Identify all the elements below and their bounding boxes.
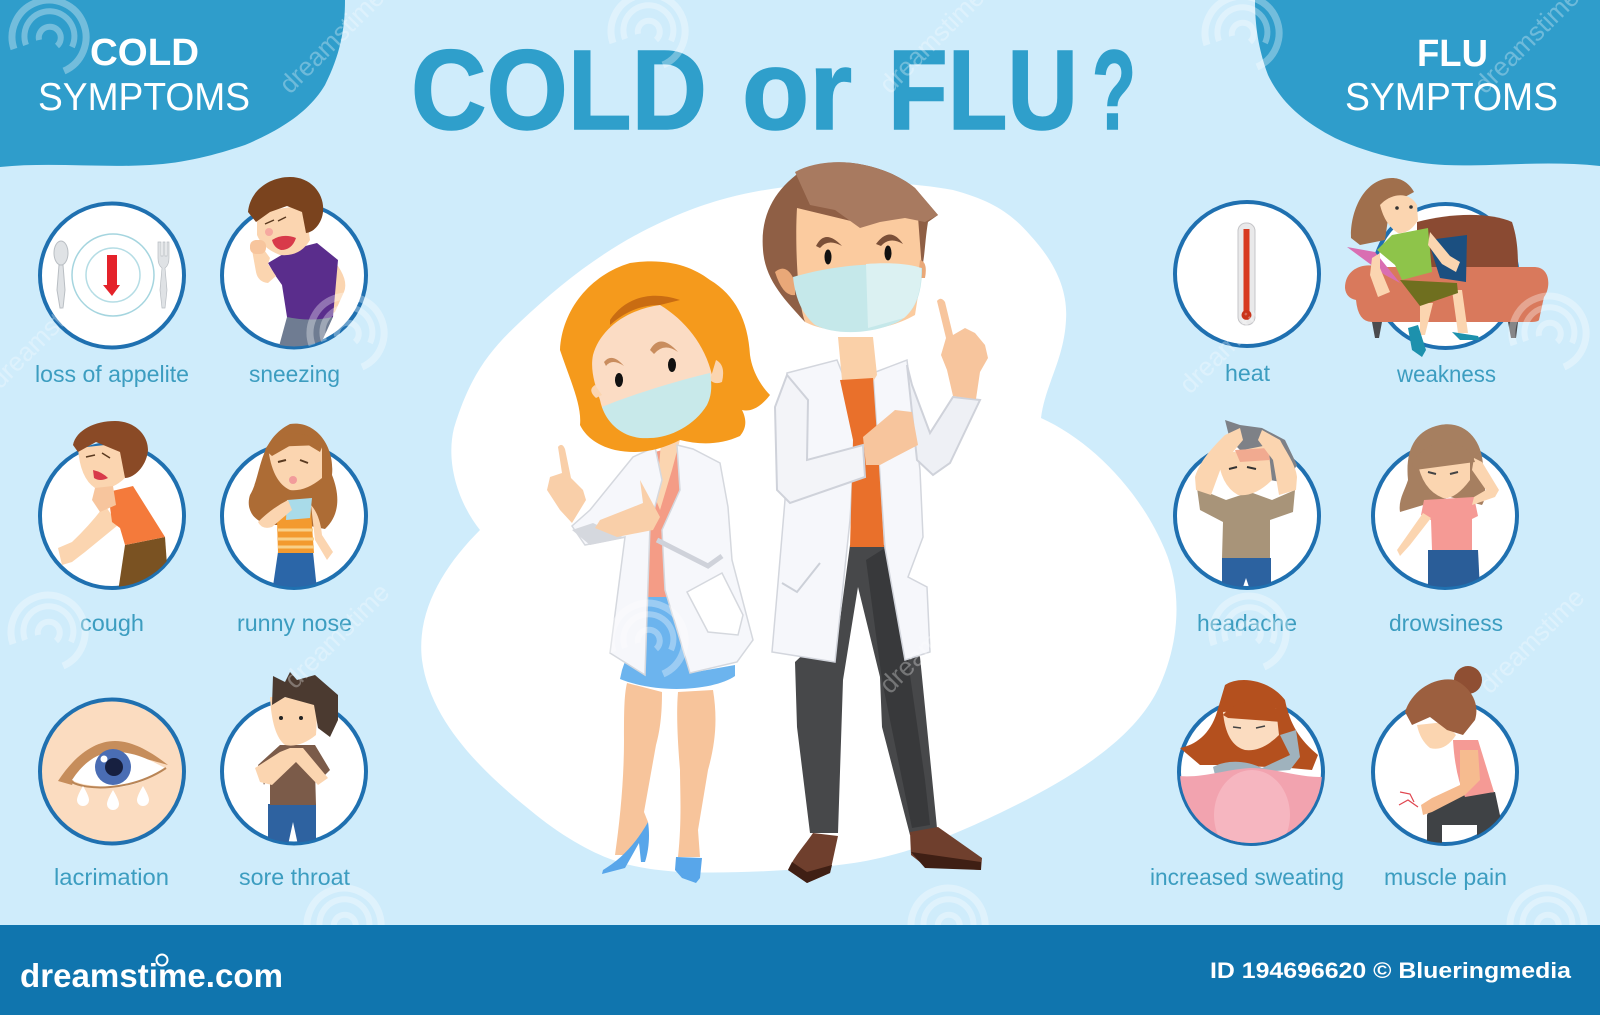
woman on sofa bbox=[1345, 178, 1548, 357]
coat body bbox=[772, 360, 930, 662]
flu heading: FLU bbox=[1417, 33, 1488, 75]
symptom: lacrimation bbox=[40, 700, 184, 890]
doctor: man bbox=[763, 162, 988, 883]
raised hand bbox=[937, 299, 988, 399]
ring bbox=[1175, 202, 1319, 346]
ring bbox=[1373, 444, 1517, 588]
symptom: muscle pain bbox=[1373, 666, 1517, 890]
flu subheading: SYMPTOMS bbox=[1345, 76, 1558, 119]
watermark: dreamstime bbox=[1173, 282, 1290, 399]
arms bbox=[907, 365, 980, 475]
pocket bbox=[687, 573, 743, 635]
cold subheading: SYMPTOMS bbox=[38, 76, 250, 119]
drowsy girl bbox=[1397, 424, 1499, 590]
watermark: dreamstime bbox=[873, 582, 990, 699]
footer bar bbox=[0, 925, 1600, 1015]
girl with tissue bbox=[249, 424, 337, 590]
label: drowsiness bbox=[1389, 610, 1503, 636]
footer logo: dreamstime.com bbox=[20, 957, 283, 994]
brows bbox=[604, 341, 678, 366]
hair bbox=[560, 261, 770, 452]
shirt bbox=[840, 378, 884, 547]
man with headache bbox=[1195, 420, 1297, 590]
thermometer bbox=[1238, 223, 1255, 325]
ring bbox=[222, 204, 366, 348]
label: muscle pain bbox=[1384, 864, 1507, 890]
label: loss of appelite bbox=[35, 361, 189, 387]
brows bbox=[816, 234, 903, 248]
symptom: loss of appetite bbox=[35, 204, 189, 387]
boy holding throat bbox=[255, 672, 338, 845]
symptom: runny nose bbox=[222, 424, 366, 636]
watermark: dreamstime bbox=[278, 577, 395, 694]
trousers bbox=[795, 545, 937, 835]
footer credit: ID 194696620 © Blueringmedia bbox=[1210, 958, 1572, 983]
symptom: cough bbox=[40, 421, 184, 636]
header: flu symptoms bbox=[1255, 0, 1600, 166]
coat bbox=[572, 445, 753, 675]
label: cough bbox=[80, 610, 144, 636]
title: COLD bbox=[411, 27, 707, 153]
fringe bbox=[610, 296, 680, 325]
ring bbox=[1179, 700, 1323, 844]
girl under blanket bbox=[1180, 680, 1322, 843]
header: cold symptoms bbox=[0, 0, 345, 167]
shirt bbox=[648, 445, 680, 597]
symptom: sore throat bbox=[222, 672, 366, 890]
coat pocket bbox=[782, 563, 820, 592]
ring bbox=[1373, 700, 1517, 844]
symptom: heat bbox=[1175, 202, 1319, 386]
ring bbox=[1175, 444, 1319, 588]
eyes bbox=[615, 373, 623, 387]
ring bbox=[40, 700, 184, 844]
face bbox=[796, 208, 922, 331]
label: sore throat bbox=[239, 864, 351, 890]
watermark: dreamstime bbox=[1473, 582, 1590, 699]
title: FLU bbox=[888, 27, 1078, 153]
ears bbox=[775, 260, 926, 295]
shoes bbox=[788, 827, 982, 883]
forearm sleeve shadow bbox=[657, 540, 722, 566]
cold header shape bbox=[0, 0, 345, 167]
symptom: drowsiness bbox=[1373, 424, 1517, 636]
fork bbox=[158, 242, 169, 308]
label: lacrimation bbox=[54, 864, 169, 890]
shoes bbox=[602, 822, 702, 883]
hair back bbox=[763, 162, 938, 322]
title bbox=[411, 27, 1136, 153]
face bbox=[592, 305, 712, 437]
mask bbox=[793, 264, 922, 332]
label: sneezing bbox=[249, 361, 340, 387]
mask bbox=[602, 373, 711, 438]
symptom: weakness bbox=[1345, 178, 1548, 387]
ring bbox=[222, 700, 366, 844]
woman with knee pain bbox=[1405, 666, 1501, 850]
footer logo icon bbox=[156, 954, 168, 966]
ring bbox=[222, 444, 366, 588]
label: headache bbox=[1197, 610, 1297, 636]
pain marks bbox=[1399, 792, 1418, 807]
spoon bbox=[54, 241, 68, 308]
ring bbox=[40, 444, 184, 588]
neck bbox=[838, 337, 877, 400]
label: heat bbox=[1225, 360, 1271, 386]
plate with arrow bbox=[72, 234, 154, 316]
fist bbox=[863, 410, 918, 465]
coughing boy bbox=[58, 421, 167, 592]
eye with tears bbox=[58, 741, 168, 810]
sleeve and hands bbox=[547, 445, 660, 545]
skirt bbox=[620, 595, 735, 689]
sneezing boy bbox=[248, 177, 345, 350]
ears bbox=[591, 360, 723, 398]
neck bbox=[656, 432, 682, 510]
doctor: woman bbox=[547, 261, 770, 883]
ring bbox=[40, 204, 184, 348]
label: runny nose bbox=[237, 610, 352, 636]
flu header shape bbox=[1255, 0, 1600, 166]
ring bbox=[1374, 204, 1518, 348]
trouser shade bbox=[866, 548, 930, 828]
title: or bbox=[742, 27, 852, 153]
label: increased sweating bbox=[1150, 864, 1344, 890]
eyes bbox=[824, 250, 832, 264]
symptom: increased sweating bbox=[1150, 680, 1344, 890]
legs bbox=[615, 683, 715, 857]
hair top bbox=[795, 162, 938, 228]
white central blob bbox=[421, 182, 1176, 873]
label: weakness bbox=[1396, 361, 1496, 387]
symptom: sneezing bbox=[222, 177, 366, 387]
cold heading: COLD bbox=[90, 32, 199, 74]
title: ? bbox=[1092, 27, 1136, 153]
symptom: headache bbox=[1175, 420, 1319, 636]
